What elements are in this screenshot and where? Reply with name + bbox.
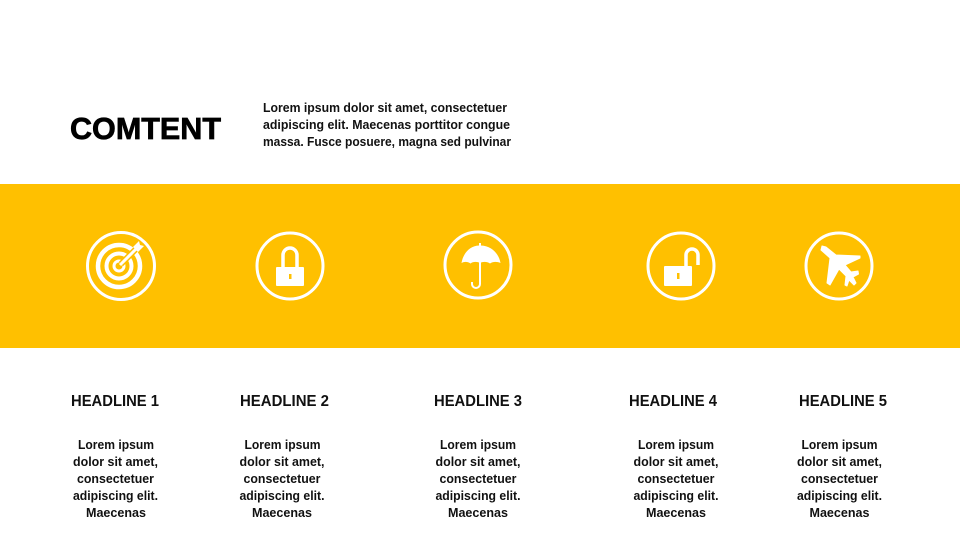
text block 2: Lorem ipsum [244,437,320,452]
text block 2: adipiscing elit. [240,488,324,503]
text block 3: adipiscing elit. [436,488,520,503]
text block 2: Maecenas [252,505,312,520]
text block 5: Lorem ipsum [802,437,878,452]
icon: umbrella [445,232,511,298]
text block 1 [73,437,158,520]
headline 2: HEADLINE 2 [240,393,329,410]
text block 1: Maecenas [86,505,146,520]
text block 2 [240,437,324,520]
intro text block: adipiscing elit. Maecenas porttitor congue [263,117,510,132]
icon: airplane [806,233,872,299]
text block 1: adipiscing elit. [73,488,158,503]
headline 3: HEADLINE 3 [434,393,522,410]
panel: yellow band [0,184,960,348]
text block 3: consectetuer [440,471,516,486]
text block 4 [634,437,718,520]
text block 4: adipiscing elit. [634,488,718,503]
text block 5 [797,437,882,520]
icon: target [88,232,154,300]
text block 5: consectetuer [801,471,878,486]
headline 1: HEADLINE 1 [71,393,159,410]
intro text block [263,100,511,149]
title: COMTENT [70,111,221,146]
text block 3: Lorem ipsum [440,437,516,452]
text block 4: Maecenas [646,505,706,520]
text block 5: adipiscing elit. [797,488,882,503]
text block 1: Lorem ipsum [78,437,154,452]
icon: open lock [648,233,714,299]
headline 5: HEADLINE 5 [799,393,887,410]
text block 3: Maecenas [448,505,508,520]
text block 2: dolor sit amet, [240,454,324,469]
text block 4: consectetuer [638,471,714,486]
intro text block: Lorem ipsum dolor sit amet, consectetuer [263,100,507,115]
text block 4: dolor sit amet, [634,454,718,469]
text block 1: consectetuer [77,471,154,486]
headline 4: HEADLINE 4 [629,393,717,410]
text block 5: Maecenas [810,505,870,520]
text block 1: dolor sit amet, [73,454,158,469]
text block 5: dolor sit amet, [797,454,882,469]
text block 3 [436,437,520,520]
text block 3: dolor sit amet, [436,454,520,469]
icon: closed lock [257,233,323,299]
intro text block: massa. Fusce posuere, magna sed pulvinar [263,134,511,149]
text block 4: Lorem ipsum [638,437,714,452]
text block 2: consectetuer [244,471,320,486]
